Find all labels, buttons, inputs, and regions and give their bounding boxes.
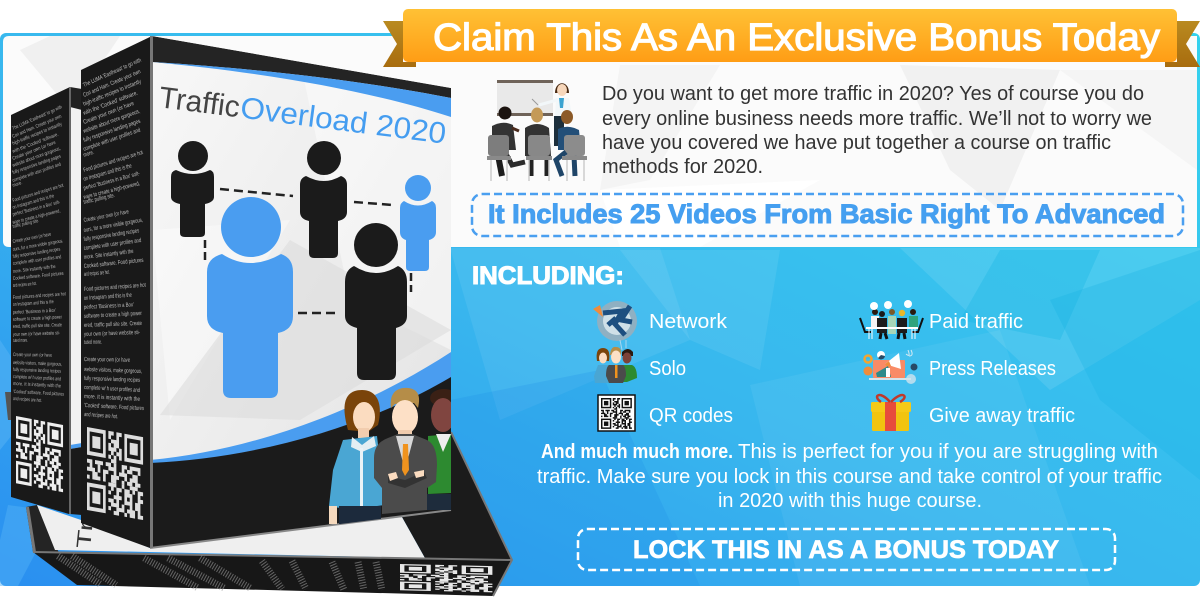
spine text: back box: perfect 'Business in a Box' bbox=[13, 308, 56, 316]
spine text: back box: tuted more. bbox=[13, 338, 28, 344]
list item: give away traffic: Give away traffic bbox=[929, 405, 1075, 427]
spine text: software to create a high power bbox=[84, 311, 142, 320]
box title: Overload 2020 bbox=[238, 92, 448, 151]
spine text: back box: Create your own (or have bbox=[12, 140, 57, 162]
spine text: perfect 'Business in a Box' soft- bbox=[83, 171, 141, 192]
spine text: back box bbox=[11, 104, 66, 404]
spine text: fully responsive landing recipes bbox=[84, 376, 140, 384]
list item: press releases: Press Releases bbox=[929, 358, 1056, 380]
spine text: back box: more. Site instantly with the bbox=[13, 264, 56, 275]
spine text: back box: Food pictures and recipes are hot bbox=[12, 183, 65, 204]
spine text: back box: fully responsive landing pages bbox=[12, 153, 62, 176]
qr code: back box bbox=[16, 418, 63, 491]
spine text: ware to create a high-powered, bbox=[82, 181, 141, 201]
spine text: complete with user profiles and bbox=[83, 238, 142, 252]
spine text: high-traffic recipes to instantly bbox=[83, 79, 142, 108]
man in grey suit bbox=[374, 388, 437, 514]
bottom lying box bbox=[5, 392, 512, 596]
figure: black person foreground bbox=[345, 223, 407, 380]
list item: solo: Solo bbox=[649, 358, 686, 380]
spine text: back box: fully responsive landing recipes bbox=[12, 246, 61, 260]
spine text: more. bbox=[83, 150, 95, 159]
spine text: back box: on Instagram and this is the bbox=[12, 193, 55, 211]
connector dashes bbox=[205, 189, 411, 313]
spine text: perfect 'Business in a Box' bbox=[84, 302, 134, 311]
spine text: back box: ware to create a high-powered, bbox=[12, 208, 61, 226]
callout: 25 videos: It Includes 25 Videos From Basic Right To Advanced bbox=[488, 199, 1165, 229]
spine text: back box: traffic pulling site. bbox=[12, 218, 40, 230]
spine text: Cori and Ham. Create your own bbox=[82, 69, 142, 99]
spine text: back box: website visitors, make gorgeous, bbox=[13, 360, 62, 368]
spine text: back box: and recipes are hot. bbox=[13, 281, 37, 289]
spine text: back box: The LUMA 'Eastheast' to go with bbox=[11, 104, 63, 132]
seated person centre bbox=[525, 108, 552, 181]
spine text: traffic pulling site. bbox=[83, 193, 116, 206]
figure: black person left bbox=[171, 141, 214, 237]
box title fragment: Tra bbox=[73, 502, 100, 550]
spine text: The LUMA 'Eastheast' to go with bbox=[82, 58, 142, 89]
box title bbox=[157, 81, 448, 151]
text block: intro: have you covered we have put together a course on traffic bbox=[602, 132, 1111, 154]
spine text: back box: more. bbox=[12, 180, 23, 189]
product box: back bbox=[11, 87, 90, 515]
text block: intro: every online business needs more traffic. We’ll not to worry we bbox=[602, 108, 1152, 130]
list item: paid traffic: Paid traffic bbox=[929, 311, 1023, 333]
text block: intro: Do you want to get more traffic in 2020? Yes of course you do bbox=[602, 83, 1144, 105]
text block: much more: This is perfect for you if you are struggling with bbox=[738, 441, 1158, 463]
spine text: back box: complete with user profiles and bbox=[12, 254, 62, 267]
spine text: ours, for a more visible gorgeous, bbox=[83, 218, 144, 234]
icon: paid traffic meeting bbox=[860, 300, 923, 339]
list item: network: Network bbox=[649, 311, 728, 333]
banner: ribbon bbox=[383, 9, 1200, 67]
spine text: more. Site instantly with the bbox=[84, 249, 134, 261]
box spine bbox=[81, 36, 152, 548]
spine text: back box: 'Cooked' software. Food pictures bbox=[13, 389, 64, 398]
spine text: back box: complete with user profiles and bbox=[12, 162, 62, 184]
spine text: back box: Food pictures and recipes are hot bbox=[13, 291, 66, 301]
box front face bbox=[150, 36, 451, 548]
text block: intro bbox=[602, 83, 1152, 178]
seated person left bbox=[487, 106, 525, 181]
spine text: complete with user profiles and bbox=[83, 128, 141, 153]
spine text: and recipes are hot. bbox=[84, 270, 110, 278]
spine text: back box: on Instagram and this is the bbox=[13, 299, 54, 308]
spine text: back box: software to create a high power bbox=[13, 314, 62, 323]
spine text: website about more gorgeous, bbox=[82, 109, 141, 135]
spine text: back box: complete w/ h user profiles and bbox=[13, 374, 61, 383]
banner title: Claim This As An Exclusive Bonus Today bbox=[433, 17, 1160, 59]
illustration: business people bbox=[329, 388, 458, 524]
spine text: with the 'Cooked' software. bbox=[82, 90, 139, 117]
spine text: back box: high-traffic recipes to instantly bbox=[12, 121, 63, 147]
figure: small blue person bbox=[400, 175, 436, 271]
spine text: back box: Cori and Ham. Create your own bbox=[11, 114, 63, 140]
box title: Traffic bbox=[157, 81, 242, 124]
panel: white top area bbox=[3, 36, 1197, 247]
spine text: Food pictures and recipes are hot bbox=[84, 283, 146, 293]
figure: black person centre bbox=[300, 141, 347, 258]
callout: 25 videos bbox=[472, 194, 1183, 236]
third person bbox=[427, 389, 451, 510]
spine text: back box: ours, for a more visible gorgeous, bbox=[12, 238, 64, 253]
heading: including: INCLUDING: bbox=[472, 262, 624, 290]
seated person right bbox=[556, 110, 587, 181]
spine text: Cooked software. Food pictures bbox=[84, 258, 144, 270]
icon: qr code bbox=[598, 395, 635, 431]
list item: qr codes: QR codes bbox=[649, 405, 733, 427]
spine text: Create your own (or have bbox=[83, 101, 136, 126]
figure: large blue person bbox=[207, 197, 293, 398]
spine text: Food pictures and recipes are hot bbox=[83, 150, 144, 174]
icon: network bbox=[593, 301, 637, 350]
spine text: back box: fully responsive landing recipes bbox=[13, 367, 61, 375]
qr code: front box bbox=[87, 429, 143, 518]
spine text: back box: and recipes are hot. bbox=[13, 396, 42, 404]
spine text: fully responsive landing pages bbox=[83, 119, 141, 144]
text block: much more: traffic. Make sure you lock in this course and take control of your traffic bbox=[537, 466, 1162, 488]
text block: intro: methods for 2020. bbox=[602, 156, 763, 178]
ribbon tail right bbox=[1165, 21, 1200, 67]
icon: press releases bbox=[864, 350, 918, 384]
spine text: complete w/ h user profiles and bbox=[84, 385, 140, 394]
spine text: ered, traffic pull site site. Create bbox=[84, 321, 142, 329]
spine text: back box: ered, traffic pull site site. Create bbox=[13, 322, 62, 330]
woman bbox=[329, 390, 385, 524]
spine text: Create your own (or have bbox=[84, 357, 131, 364]
bottom band bbox=[150, 352, 451, 464]
spine text: back box: Cooked software. Food pictures bbox=[13, 271, 64, 282]
text block: much more: in 2020 with this huge course. bbox=[718, 490, 982, 512]
spine text: website visitors, make gorgeous, bbox=[83, 367, 142, 375]
spine text: Create your own (or have bbox=[83, 209, 130, 224]
spine text: 'Cooked' software. Food pictures bbox=[84, 403, 144, 412]
spine text: back box: more. It is instantly with the bbox=[13, 381, 61, 390]
spine text: back box: website about more gorgeous, bbox=[12, 146, 62, 169]
spine text bbox=[82, 58, 146, 420]
qr code: lying box bbox=[400, 565, 492, 592]
spine text: fully responsive landing recipes bbox=[83, 228, 140, 243]
spine text: tuted more. bbox=[84, 340, 102, 346]
call to action bbox=[578, 529, 1115, 570]
call to action: LOCK THIS IN AS A BONUS TODAY bbox=[633, 536, 1059, 564]
spine text: back box: your own (or have website sti- bbox=[13, 330, 60, 338]
text block: much more bbox=[537, 441, 1162, 512]
text block: much more: And much much more. bbox=[541, 441, 733, 463]
spine text: back box: Create your own (or have bbox=[12, 232, 52, 245]
spine text: back box: perfect 'Business in a Box' soft- bbox=[12, 199, 61, 218]
icon: solo team bbox=[594, 347, 637, 383]
icon: seminar presenter and audience bbox=[487, 80, 587, 181]
spine text: back box: Create your own (or have bbox=[13, 352, 52, 359]
spine text: on Instagram and this is the bbox=[84, 293, 132, 302]
spine text: your own (or have website sti- bbox=[84, 330, 140, 338]
spine text: more. It is instantly with the bbox=[84, 394, 141, 403]
product box: front bbox=[81, 36, 458, 548]
presenter bbox=[532, 83, 572, 146]
spine text: and recipes are hot. bbox=[84, 412, 118, 420]
icon: gift box bbox=[871, 395, 911, 431]
spine text: back box: with the 'Cooked' software. bbox=[12, 132, 59, 155]
spine text: on Instagram and this is the bbox=[83, 163, 133, 183]
ribbon tail left bbox=[383, 21, 416, 67]
top band bbox=[152, 36, 451, 98]
